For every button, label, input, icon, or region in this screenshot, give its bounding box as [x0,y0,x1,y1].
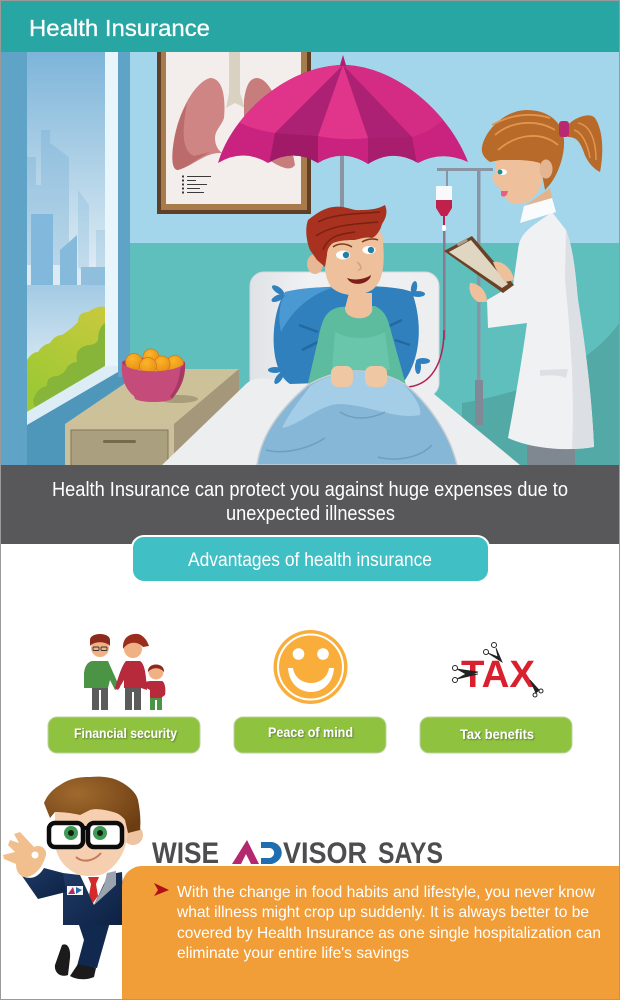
title: Health Insurance [29,15,210,41]
patient hands [331,366,387,387]
nurse coat [487,188,594,449]
advice panel [122,866,620,1000]
fruit bowl [122,349,185,402]
label: Tax benefits [460,726,534,742]
label: Financial security [74,725,177,741]
label [48,717,200,753]
pillow [268,281,430,385]
advice text: what illness might crop up suddenly. It is always better to be [176,904,589,921]
caption band [0,465,620,544]
wall [0,52,620,466]
label: Peace of mind [268,724,353,740]
wise advisor says heading: SAYS [378,837,443,870]
advice text: covered by Health Insurance as one single hospitalization can [177,925,601,942]
advice text: With the change in food habits and lifestyle, you never know [177,884,595,901]
label [234,717,386,753]
section heading pill: Advantages of health insurance [188,550,432,571]
icon: AD logo letters [232,840,282,864]
bed [162,272,520,465]
mascot head [44,777,143,876]
patient [306,205,406,385]
clipboard and hands [444,236,514,302]
umbrella [210,50,475,208]
advice text: eliminate your entire life's savings [177,945,409,962]
mascot jacket [22,868,124,925]
nurse head [482,110,602,204]
IV tube [408,330,444,387]
section heading pill [132,536,489,582]
icon: smiley [274,630,348,704]
bedside table [65,369,239,466]
wise advisor says heading [152,837,443,870]
nurse legs [527,446,575,466]
nurse [444,110,602,466]
advantage: financial security [48,634,200,753]
patient head [306,205,386,295]
advice text [176,884,601,962]
patient body [308,293,406,385]
blanket [257,371,457,465]
mascot hand [3,832,46,877]
wise advisor says heading: VISOR [283,837,367,870]
window [0,52,130,466]
mascot legs and shoes [55,922,110,979]
icon: tax with scissors: TAX [461,654,536,696]
caption band: Health Insurance can protect you against huge expenses due to [52,479,568,501]
lung poster [157,52,311,214]
hero illustration: hospital room [0,50,620,466]
mascot: wise advisor [3,777,143,979]
advantage: peace of mind [234,630,386,753]
IV stand [436,168,493,425]
wise advisor says heading: WISE [152,837,219,870]
label [420,717,572,753]
header bar [0,0,620,52]
advantage: tax benefits [420,642,572,753]
arrow bullet [154,883,169,896]
icon: family [84,634,165,710]
icon: tax with scissors [452,642,543,697]
caption band: unexpected illnesses [226,503,395,525]
